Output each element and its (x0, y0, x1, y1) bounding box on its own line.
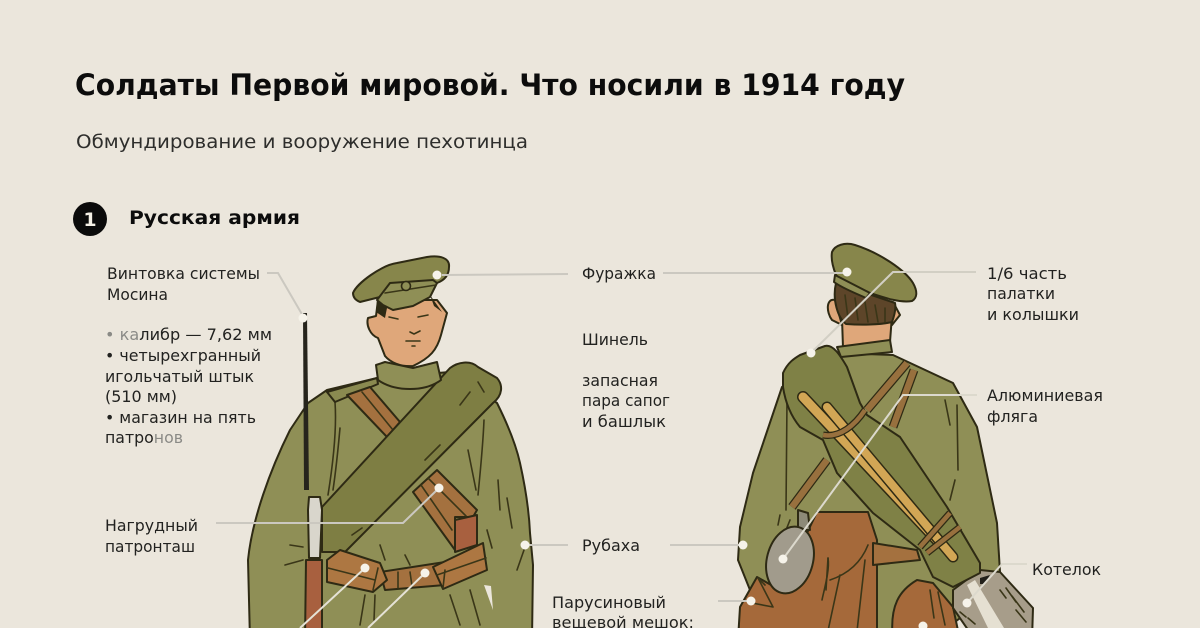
label: chest bandolier (105, 516, 198, 556)
label: spare boots and bashlyk: и башлык (582, 412, 666, 431)
collar back (837, 340, 892, 357)
label: canvas haversack (552, 593, 694, 628)
shoulder board (327, 378, 378, 402)
right bag (892, 580, 960, 628)
label: canteen (987, 386, 1103, 426)
label: rifle: Винтовка системы (107, 264, 260, 283)
label: cap: Фуражка (582, 264, 656, 283)
greatcoat roll (322, 363, 501, 552)
label: tent part: палатки (987, 284, 1055, 303)
label: chest bandolier: Нагрудный (105, 516, 198, 535)
label: tent part: 1/6 часть (987, 264, 1067, 283)
label: rifle: • калибр — 7,62 мм (105, 325, 272, 344)
label: canvas haversack: Парусиновый (552, 593, 666, 612)
label: rifle: • четырехгранный (105, 346, 261, 365)
rifle (303, 313, 309, 490)
cap back (832, 244, 916, 301)
label: tent part (987, 264, 1079, 324)
label: shirt: Рубаха (582, 536, 640, 555)
cap (353, 256, 449, 302)
label: chest bandolier: патронташ (105, 537, 195, 556)
section heading: Russian army: 1 (83, 209, 97, 231)
tent pegs (803, 397, 937, 540)
belt (873, 543, 920, 565)
face (367, 300, 447, 366)
illustration: soldier front view (248, 256, 533, 628)
belt and pouches (380, 562, 445, 590)
tent roll straps (823, 410, 865, 435)
label: spare boots and bashlyk: пара сапог (582, 391, 670, 410)
collar (376, 362, 441, 389)
label: pot: Котелок (1032, 560, 1101, 579)
chest bandolier straps (347, 387, 400, 437)
tent roll (783, 346, 980, 587)
illustration: soldier back view (738, 244, 1033, 628)
label: spare boots and bashlyk: запасная (582, 371, 658, 390)
callout lines and dots (216, 268, 1027, 628)
section heading: Russian army: Русская армия (129, 207, 300, 229)
neck (842, 315, 892, 348)
pot (953, 570, 1033, 628)
label: rifle: патронов (105, 428, 183, 447)
label: rifle: (510 мм) (105, 387, 177, 406)
label: greatcoat: Шинель (582, 330, 648, 349)
label: canteen: Алюминиевая (987, 386, 1103, 405)
coat back (738, 353, 1000, 628)
cross straps (867, 363, 907, 410)
label: canteen: фляга (987, 407, 1038, 426)
hair (835, 283, 895, 325)
title: Солдаты Первой мировой. Что носили в 1914 году (75, 68, 905, 102)
coat body (248, 372, 533, 628)
label: spare boots and bashlyk (582, 371, 670, 431)
label: rifle: Мосина (107, 285, 168, 304)
label: rifle (105, 264, 272, 447)
label: tent part: и колышки (987, 305, 1079, 324)
label: rifle: • магазин на пять (105, 408, 256, 427)
haversack (738, 512, 877, 628)
canteen (798, 510, 810, 530)
section heading: Russian army (73, 202, 300, 236)
ear (828, 300, 900, 325)
cartridge pouch upright (455, 515, 477, 552)
subtitle: Обмундирование и вооружение пехотинца (76, 131, 528, 153)
label: rifle: игольчатый штык (105, 367, 254, 386)
